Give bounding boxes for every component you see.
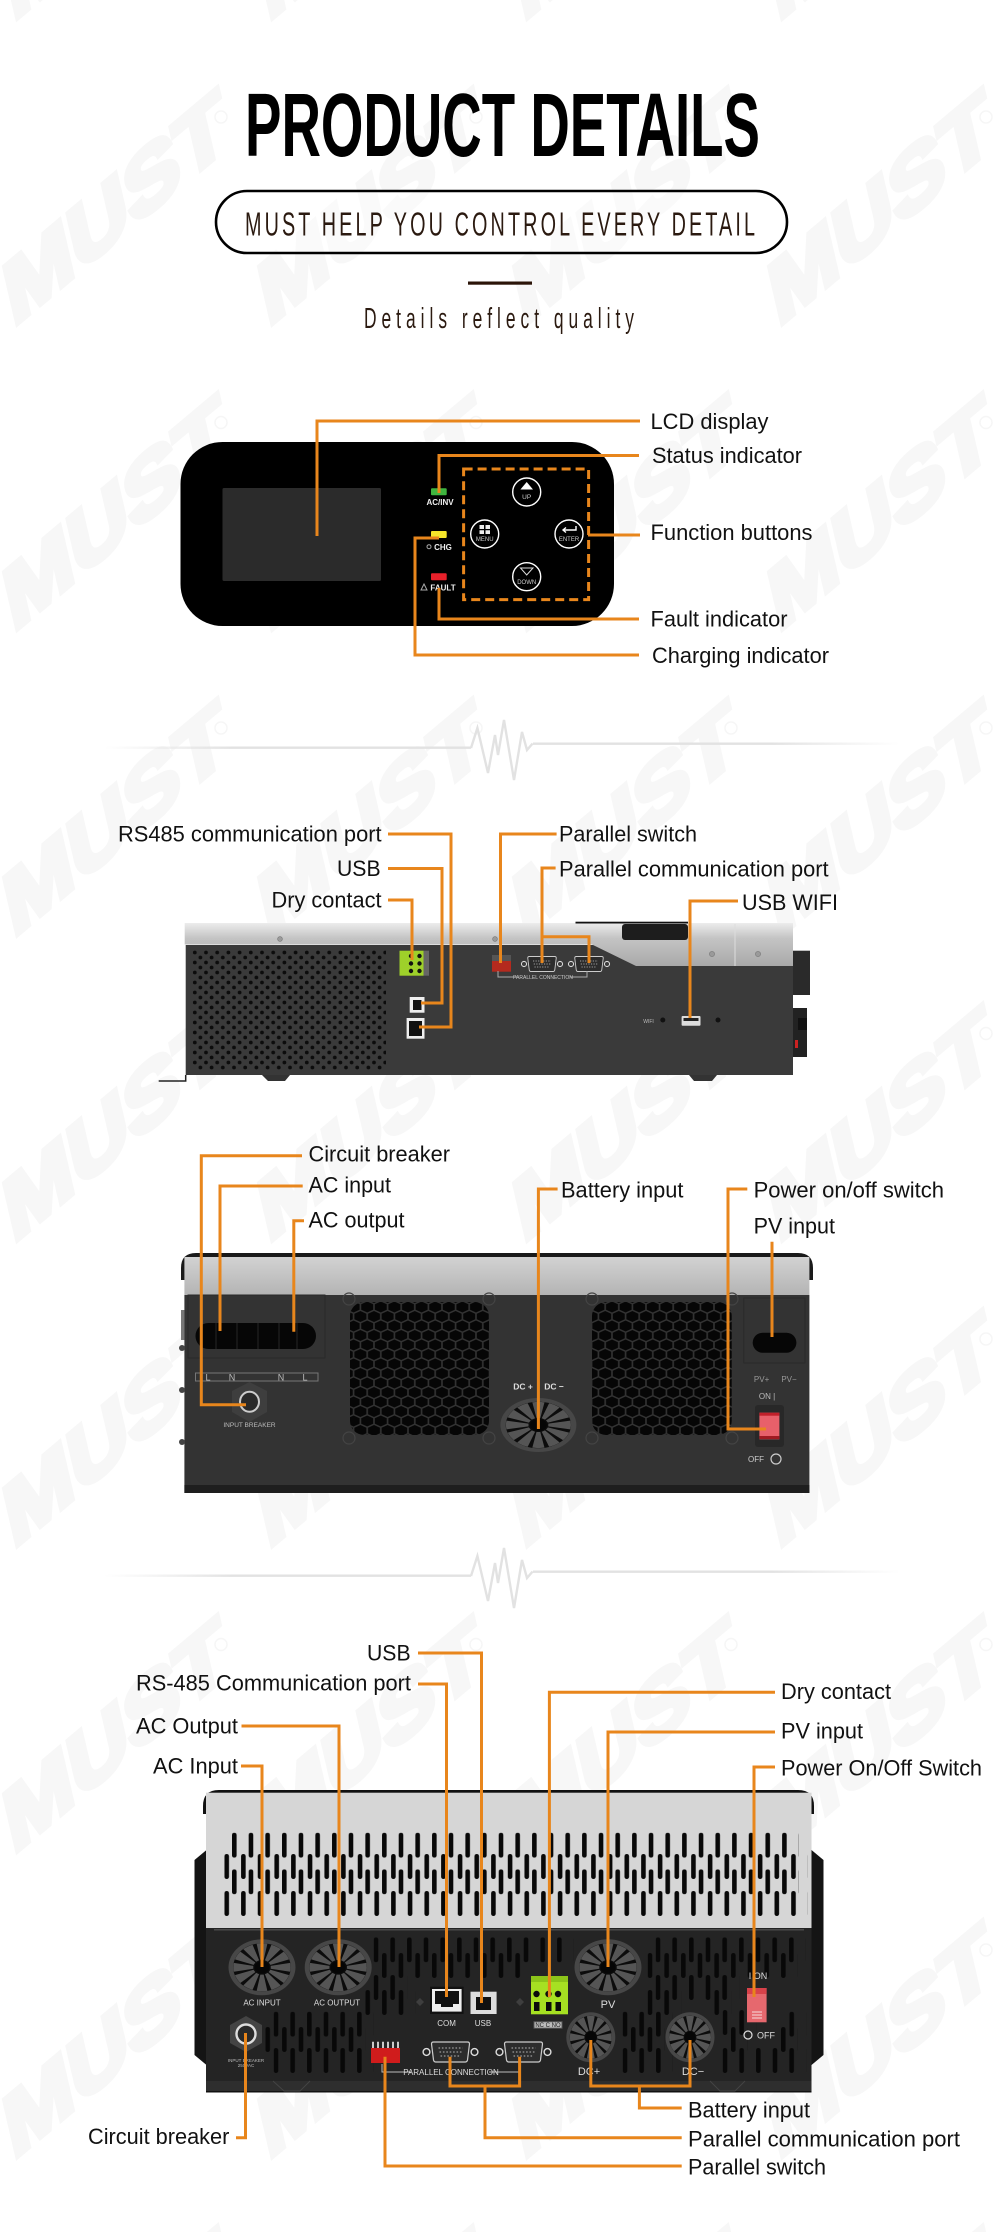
AC output gland xyxy=(305,1939,372,2008)
callout: Parallel switch: Parallel switch xyxy=(559,822,697,847)
body vent slots xyxy=(265,1937,806,2073)
callout: PV input: PV input xyxy=(754,1213,835,1238)
terminal strip labels: L xyxy=(302,1372,308,1382)
divider 2 xyxy=(104,1548,900,1608)
AC input gland xyxy=(228,1939,296,2008)
MENU button: MENU xyxy=(476,537,494,543)
panel: side view xyxy=(118,822,838,1081)
callout: LCD display: LCD display xyxy=(650,409,768,434)
callout: Dry contact xyxy=(549,1679,891,1997)
callout: LCD display xyxy=(317,409,768,536)
dark body xyxy=(179,1295,809,1493)
RJ45 port xyxy=(407,1018,424,1039)
callout: USB WIFI xyxy=(690,890,838,1018)
status LED: AC/INV xyxy=(426,498,454,507)
fault LED xyxy=(421,573,456,592)
parallel switch xyxy=(492,955,511,972)
status LED xyxy=(426,488,454,507)
battery gland: DC − xyxy=(544,1382,564,1392)
port screws xyxy=(416,1998,524,2006)
parallel switch xyxy=(371,2042,400,2063)
LCD screen xyxy=(222,488,381,581)
PV gland: PV xyxy=(601,1999,616,2011)
callout: USB WIFI: USB WIFI xyxy=(742,890,838,915)
parallel ports: PARALLEL CONNECTION xyxy=(403,2068,499,2077)
callout: Charging indicator: Charging indicator xyxy=(652,643,829,668)
callout: AC Input: AC Input xyxy=(153,1753,238,1778)
power switch: ON | xyxy=(759,1392,775,1401)
power switch: OFF xyxy=(757,2030,775,2040)
right PV terminal cover: PV− xyxy=(781,1375,797,1384)
callout: Circuit breaker: Circuit breaker xyxy=(88,2124,229,2149)
callout: Dry contact: Dry contact xyxy=(781,1679,891,1704)
short accent bar xyxy=(468,282,532,285)
callout: Parallel switch: Parallel switch xyxy=(688,2154,826,2179)
divider 1 xyxy=(104,720,900,780)
callout: USB xyxy=(367,1641,482,2003)
callout: PV input: PV input xyxy=(781,1719,863,1744)
DC plus gland: DC+ xyxy=(578,2066,600,2078)
callout: Circuit breaker xyxy=(88,2033,246,2149)
terminal strip labels: N xyxy=(229,1372,235,1382)
handle xyxy=(576,922,688,940)
callout: AC output xyxy=(294,1207,404,1332)
terminal strip labels: N xyxy=(278,1372,284,1382)
USB port: USB xyxy=(475,2019,491,2028)
callout: Charging indicator xyxy=(415,538,829,668)
fan grill left xyxy=(350,1302,489,1435)
callout: Parallel communication port xyxy=(450,2057,960,2152)
callout: Status indicator: Status indicator xyxy=(652,443,802,468)
callout: Dry contact: Dry contact xyxy=(272,887,382,912)
input breaker xyxy=(223,1382,276,1429)
AC input gland: AC INPUT xyxy=(243,1998,281,2008)
DC minus gland xyxy=(666,2012,714,2078)
panel: bottom view xyxy=(179,1142,944,1493)
left AC terminal cover xyxy=(188,1295,325,1358)
callout: USB: USB xyxy=(337,856,381,881)
power switch: OFF xyxy=(748,1455,764,1464)
USB wifi port: WIFI xyxy=(643,1019,654,1025)
power switch xyxy=(748,1392,784,1464)
callout: Battery input xyxy=(538,1178,684,1429)
callout: AC input: AC input xyxy=(308,1173,391,1198)
callout: Battery input: Battery input xyxy=(561,1178,684,1203)
fan grill right xyxy=(592,1302,732,1435)
callout: RS-485 Communication port: RS-485 Communication port xyxy=(136,1671,411,1696)
callout: Battery input: Battery input xyxy=(688,2098,810,2123)
DC minus gland: DC− xyxy=(682,2066,704,2078)
charging LED: CHG xyxy=(434,543,452,552)
PV gland xyxy=(574,1939,642,2011)
vent perforations xyxy=(192,950,386,1070)
callout: USB: USB xyxy=(367,1641,411,1666)
callout: PV input xyxy=(754,1213,835,1337)
callout: Parallel switch xyxy=(500,822,697,963)
side brackets xyxy=(194,1850,824,2065)
input breaker: INPUT BREAKER xyxy=(228,2058,265,2063)
AC output gland: AC OUTPUT xyxy=(314,1998,360,2008)
callout: RS-485 Communication port xyxy=(136,1671,446,1997)
dry contact terminal xyxy=(400,951,429,976)
tagline: Details reflect quality xyxy=(364,303,634,335)
dark rear body xyxy=(206,1928,812,2092)
UP button: UP xyxy=(522,494,531,501)
dry contact terminal: NC C NO xyxy=(535,2023,561,2029)
subtitle pill: MUST HELP YOU CONTROL EVERY DETAIL xyxy=(245,205,755,243)
callout: AC input xyxy=(220,1173,391,1331)
right PV terminal cover xyxy=(744,1298,805,1384)
USB port xyxy=(410,997,424,1013)
panel: rear view xyxy=(88,1641,982,2179)
power switch xyxy=(744,1971,775,2040)
terminal strip labels xyxy=(196,1372,318,1382)
dry contact terminal xyxy=(531,1976,568,2029)
subtitle pill xyxy=(216,191,787,253)
side device body xyxy=(159,945,810,1081)
callout: USB xyxy=(337,856,442,1003)
DOWN button: DOWN xyxy=(517,580,536,586)
callout: Parallel communication port: Parallel communication port xyxy=(688,2127,960,2152)
cover screws xyxy=(278,937,761,957)
callout: Circuit breaker xyxy=(201,1142,450,1405)
input breaker: INPUT BREAKER xyxy=(223,1422,276,1429)
top outline xyxy=(203,1790,814,1814)
callout: Parallel communication port xyxy=(542,857,829,963)
callout: Circuit breaker: Circuit breaker xyxy=(308,1142,450,1167)
parallel ports xyxy=(498,956,610,981)
fault LED: FAULT xyxy=(430,584,456,592)
callout: Power On/Off Switch: Power On/Off Switch xyxy=(781,1756,982,1781)
callout: Power on/off switch xyxy=(728,1178,944,1429)
battery gland: DC + xyxy=(513,1382,533,1392)
parallel ports: PARALLEL CONNECTION xyxy=(513,975,573,981)
grey vented cover xyxy=(206,1793,812,1928)
battery gland xyxy=(500,1382,576,1452)
callout: AC output: AC output xyxy=(308,1207,404,1232)
panel body xyxy=(180,442,614,626)
callout: Power on/off switch: Power on/off switch xyxy=(754,1178,944,1203)
terminal strip labels: L xyxy=(205,1372,211,1382)
device outline and silver top xyxy=(181,1253,813,1295)
grill screws xyxy=(343,1293,738,1444)
input breaker xyxy=(228,2016,265,2068)
callout: Function buttons: Function buttons xyxy=(650,520,812,545)
power switch: I ON xyxy=(749,1971,767,1981)
callout: Fault indicator xyxy=(439,588,788,632)
COM port: COM xyxy=(437,2019,456,2028)
right PV terminal cover: PV+ xyxy=(754,1375,770,1384)
silver top cover xyxy=(185,923,793,966)
callout: Parallel switch xyxy=(385,2057,826,2179)
COM port xyxy=(430,1987,464,2028)
DC plus gland xyxy=(566,2012,615,2078)
callout: Status indicator xyxy=(439,443,802,493)
callout: Power On/Off Switch xyxy=(754,1756,982,1997)
panel: front control panel xyxy=(180,409,829,668)
callout: AC Output xyxy=(136,1713,339,1967)
parallel ports xyxy=(382,2042,551,2077)
USB port xyxy=(470,1992,497,2028)
ENTER button: ENTER xyxy=(559,537,580,543)
callout: PV input xyxy=(608,1719,863,1967)
callout: Dry contact xyxy=(272,887,412,960)
callout: RS485 communication port: RS485 communication port xyxy=(118,822,382,847)
function button group xyxy=(464,469,589,600)
callout: AC Output: AC Output xyxy=(136,1713,238,1738)
USB wifi port xyxy=(643,1016,720,1026)
callout: AC Input xyxy=(153,1753,262,1967)
callout: RS485 communication port xyxy=(118,822,451,1027)
callout: Parallel communication port: Parallel communication port xyxy=(559,857,829,882)
callout: Fault indicator: Fault indicator xyxy=(650,607,788,632)
charging LED xyxy=(427,531,452,552)
input breaker: 250VAC xyxy=(238,2063,255,2068)
callout: Battery input xyxy=(591,2040,810,2123)
